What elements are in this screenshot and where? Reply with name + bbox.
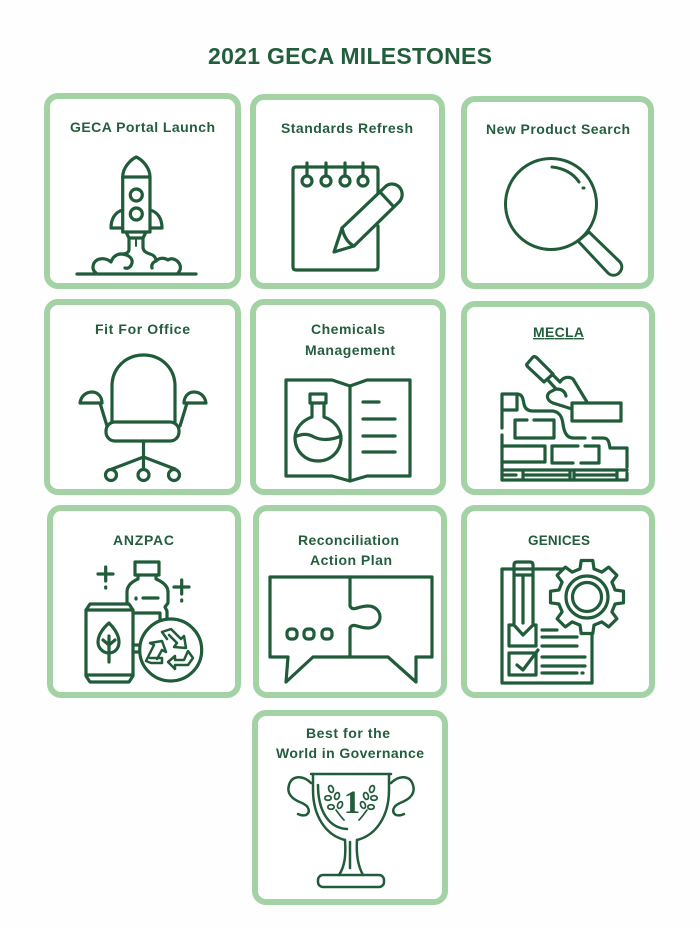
panel: New Product Search (464, 99, 651, 286)
heading: Best for the World in Governance (276, 725, 424, 761)
icon: puzzle speech bubbles (270, 577, 432, 682)
heading: GECA Portal Launch: GECA Portal Launch (70, 119, 215, 135)
laurel, right (359, 785, 377, 820)
panel: Fit For Office (47, 302, 238, 492)
heading: MECLA: MECLA (533, 324, 584, 340)
heading: Chemicals Management: Management (305, 342, 395, 358)
heading: ANZPAC: ANZPAC (113, 532, 174, 548)
laurel, left (325, 785, 344, 820)
panel: GECA Portal Launch (47, 96, 238, 286)
icon: open book with flask (286, 380, 410, 481)
heading: New Product Search: New Product Search (486, 121, 630, 137)
icon: trophy (288, 774, 414, 887)
panel: Reconciliation Action Plan (256, 508, 444, 695)
heading: Fit For Office: Fit For Office (95, 321, 190, 337)
icon: bottle, can and recycling (86, 562, 202, 682)
panel: Standards Refresh (253, 97, 442, 286)
panel: GENICES (464, 508, 652, 695)
heading: Chemicals Management: Chemicals (311, 321, 385, 337)
icon: brick wall and trowel (502, 357, 627, 480)
panel: Best for the World in Governance (255, 713, 445, 902)
heading: Reconciliation Action Plan (298, 532, 399, 568)
heading: Best for the World in Governance: Best for the (306, 725, 390, 741)
icon: checklist, pencil and gear (502, 560, 624, 683)
heading: Chemicals Management (305, 321, 395, 358)
panel: Chemicals Management (253, 302, 443, 492)
trophy number: 1 (344, 785, 360, 821)
icon: magnifying glass (506, 158, 622, 275)
heading: Standards Refresh: Standards Refresh (281, 120, 413, 136)
panel: MECLA (464, 304, 652, 492)
heading: Best for the World in Governance: World in Governance (276, 745, 424, 761)
panel: ANZPAC (50, 508, 238, 695)
heading: Reconciliation Action Plan: Action Plan (310, 552, 392, 568)
heading: Reconciliation Action Plan: Reconciliation (298, 532, 399, 548)
icon: office chair (80, 355, 206, 480)
title: 2021 GECA MILESTONES (208, 43, 492, 69)
icon: notepad and pencil (293, 163, 402, 270)
heading: GENICES: GENICES (528, 533, 590, 548)
icon: rocket (77, 157, 196, 274)
